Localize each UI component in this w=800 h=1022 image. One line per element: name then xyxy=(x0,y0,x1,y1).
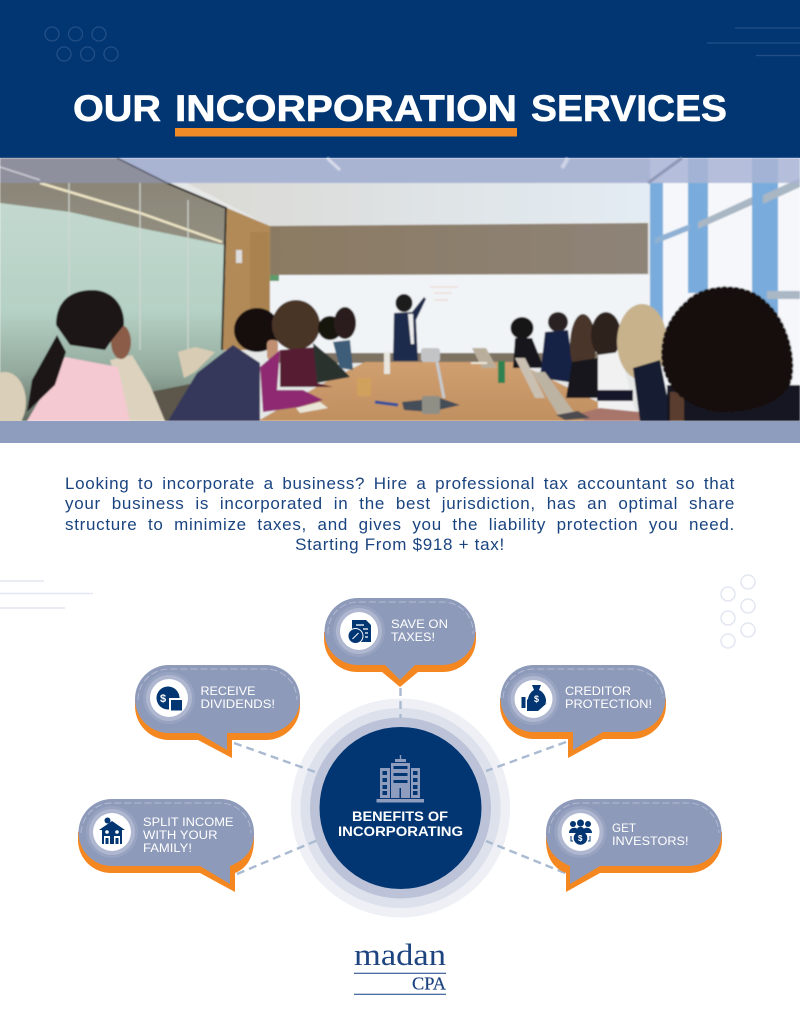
icon: investors with dollar xyxy=(569,820,592,845)
whiteboard xyxy=(270,275,652,353)
presenter xyxy=(396,294,412,312)
callout: creditor protection xyxy=(500,665,666,758)
intro paragraph xyxy=(65,474,735,554)
wooden door xyxy=(223,208,270,350)
floor at left xyxy=(150,370,260,421)
callout: split income with your family xyxy=(78,799,254,892)
photo caption band xyxy=(0,421,800,443)
label: CREDITOR xyxy=(565,684,631,698)
seated people, far right side xyxy=(510,317,534,339)
intro paragraph: structure to minimize taxes, and gives you the liability protection you need. xyxy=(65,515,735,534)
header banner xyxy=(0,0,800,158)
laptops and table items xyxy=(472,348,497,368)
callout: receive dividends xyxy=(135,665,300,758)
logo: madan CPA: madan xyxy=(354,937,447,972)
label: GET xyxy=(612,821,636,835)
label xyxy=(143,815,234,855)
label: SPLIT INCOME xyxy=(143,815,234,829)
large curly hair xyxy=(663,288,791,410)
label: PROTECTION! xyxy=(565,697,652,711)
connector lines xyxy=(234,688,566,874)
label: INVESTORS! xyxy=(612,834,688,848)
label xyxy=(612,821,688,848)
title xyxy=(73,88,727,129)
icon: dollar pie chart: $ xyxy=(160,693,166,705)
brown band xyxy=(270,223,648,275)
label xyxy=(391,617,448,644)
icon: family in house xyxy=(99,818,125,844)
icon: hand holding money bag xyxy=(522,685,547,711)
people, near left side xyxy=(168,345,260,421)
icon: tax document xyxy=(348,620,371,644)
icon: hand holding money bag: $ xyxy=(534,694,539,704)
label: RECEIVE xyxy=(200,684,256,698)
callout: save on taxes xyxy=(324,598,476,687)
callout: get investors xyxy=(546,799,722,892)
title: INCORPORATION xyxy=(175,88,517,129)
label xyxy=(200,684,275,711)
circle label: BENEFITS OF xyxy=(352,809,448,824)
title underline xyxy=(175,128,517,136)
title: OUR xyxy=(73,88,161,129)
ceiling xyxy=(0,158,650,183)
woman in pink xyxy=(27,357,130,421)
label: WITH YOUR xyxy=(143,828,218,842)
icon: dollar pie chart xyxy=(156,686,182,710)
icon: office building xyxy=(376,755,424,802)
upper wall xyxy=(187,183,650,226)
central circle: benefits of incorporating xyxy=(291,698,510,918)
label: DIVIDENDS! xyxy=(200,697,275,711)
windows xyxy=(650,158,800,421)
left glass wall xyxy=(0,183,225,421)
photo: conference room xyxy=(0,158,800,432)
logo: madan CPA: CPA xyxy=(412,974,446,994)
icon: investors with dollar: $ xyxy=(578,834,583,843)
decorative circles right xyxy=(721,575,755,648)
table xyxy=(258,362,640,421)
intro paragraph: Starting From $918 + tax! xyxy=(295,535,505,554)
title: SERVICES xyxy=(531,88,727,129)
label: TAXES! xyxy=(391,630,435,644)
intro paragraph: Looking to incorporate a business? Hire a professional tax accountant so that xyxy=(65,474,735,493)
label: FAMILY! xyxy=(143,841,192,855)
label: SAVE ON xyxy=(391,617,448,631)
circle label: INCORPORATING xyxy=(338,824,463,839)
logo: madan CPA xyxy=(354,937,447,995)
label xyxy=(565,684,652,711)
intro paragraph: your business is incorporated in the best jurisdiction, has an optimal share xyxy=(65,494,735,513)
chairs xyxy=(0,372,26,432)
decorative lines left xyxy=(0,581,93,608)
circle label xyxy=(338,809,463,839)
